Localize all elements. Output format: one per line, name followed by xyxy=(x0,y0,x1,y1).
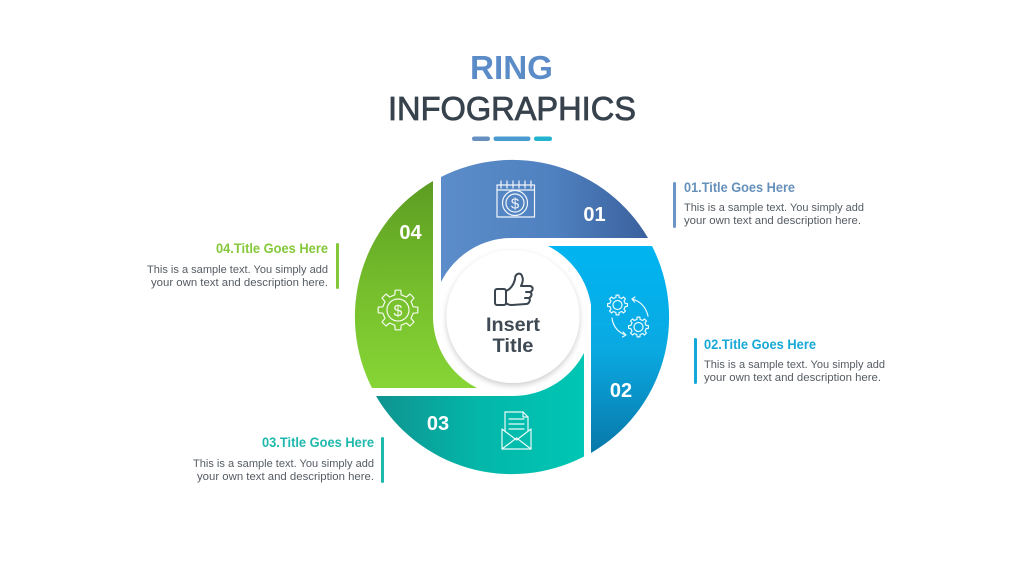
segment 04 xyxy=(355,181,477,388)
callout 03: This is a sample text. You simply add xyxy=(193,458,374,470)
number 03: 03 xyxy=(427,413,449,435)
icon: gear with dollar xyxy=(378,290,418,330)
callout 01: 01.Title Goes Here xyxy=(684,180,795,195)
icon: calendar with dollar: $ xyxy=(511,196,520,212)
callout 02: your own text and description here. xyxy=(704,372,881,384)
icon: open envelope with letter xyxy=(502,412,531,449)
centre label: Insert xyxy=(486,314,541,336)
centre disc: Title xyxy=(492,335,534,357)
callout 02 xyxy=(694,337,885,384)
segment 01 xyxy=(441,160,648,282)
heading: RING: RING xyxy=(470,50,553,87)
number 01: 01 xyxy=(583,204,606,226)
segment 02 xyxy=(548,246,669,453)
segment 03 xyxy=(376,353,584,474)
callout 04 xyxy=(147,241,339,289)
callout 04: This is a sample text. You simply add xyxy=(147,264,328,276)
callout 04: your own text and description here. xyxy=(151,277,328,289)
callout 04: 04.Title Goes Here xyxy=(216,241,328,256)
icon: calendar with dollar xyxy=(497,181,534,217)
callout 03: your own text and description here. xyxy=(197,471,374,483)
heading: INFOGRAPHICS: INFOGRAPHICS xyxy=(388,91,636,128)
callout 02: 02.Title Goes Here xyxy=(704,337,816,352)
title xyxy=(388,50,636,141)
title underline dashes xyxy=(472,136,552,141)
callout 03 xyxy=(193,435,384,483)
callout 03: 03.Title Goes Here xyxy=(262,435,374,450)
number 04: 04 xyxy=(399,222,422,244)
centre disc xyxy=(446,250,580,383)
icon: thumbs up xyxy=(495,274,533,305)
callout 01: This is a sample text. You simply add xyxy=(684,202,864,214)
ring chart xyxy=(355,160,669,474)
number 02: 02 xyxy=(610,380,632,402)
callout 02: This is a sample text. You simply add xyxy=(704,359,885,371)
callout 01 xyxy=(673,180,864,228)
callout 01: your own text and description here. xyxy=(684,215,861,227)
icon: gear with dollar: $ xyxy=(394,303,403,320)
icon: gears with arrows xyxy=(608,295,648,337)
